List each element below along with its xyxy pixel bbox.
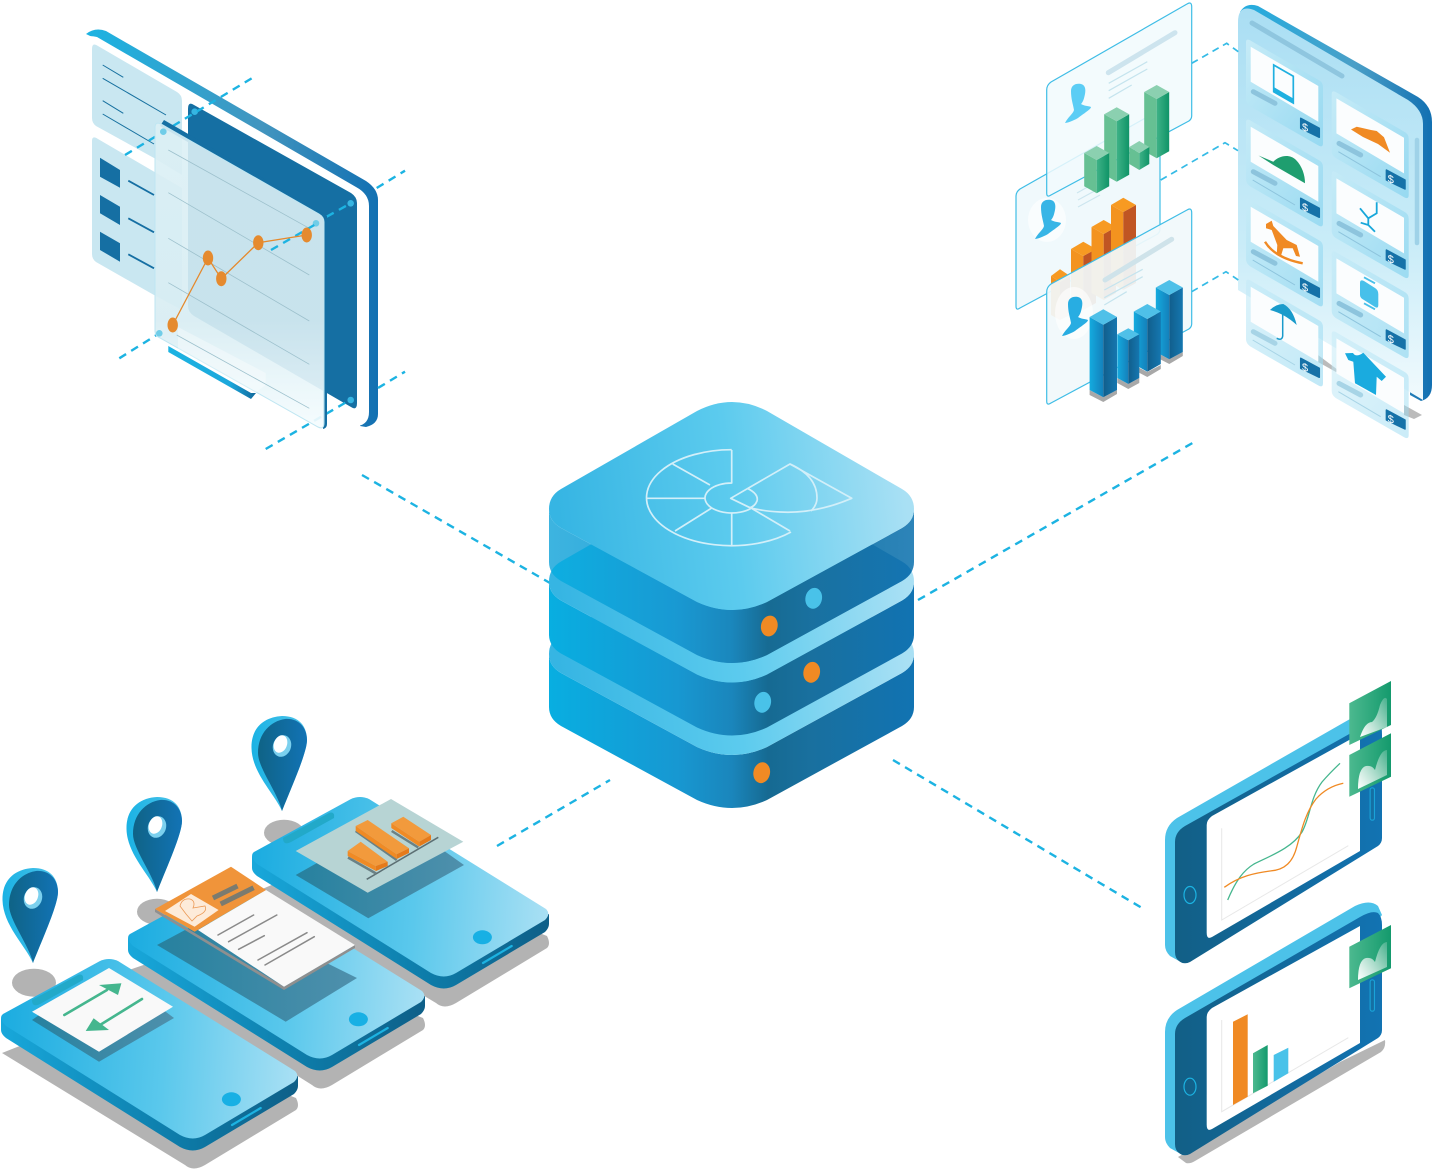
blue bars: [1090, 280, 1183, 402]
phone shadow: [1178, 1040, 1385, 1163]
product card row 1 right: $: [1388, 173, 1395, 187]
bar chart screen: [296, 799, 464, 918]
product card row 4 left: $: [1302, 361, 1309, 375]
glass chart sheet: [155, 120, 327, 429]
icon: tablet product: [1274, 65, 1293, 103]
product card row 1 left: [1246, 40, 1323, 146]
card: green chart: [1047, 3, 1192, 196]
icon: person: [1065, 84, 1091, 123]
list panel: [92, 45, 182, 175]
server layer 3: [549, 547, 914, 808]
stand base: [168, 346, 256, 399]
server layer 2: [549, 474, 914, 736]
green bars: [1084, 85, 1169, 193]
profile document: [155, 867, 357, 1022]
icon: pie chart logo: [647, 450, 852, 546]
icon: map pin 1: [2, 868, 58, 963]
panel: three location phones: [1, 716, 549, 1168]
phone 1: [1, 959, 298, 1168]
bar: blue: [1274, 1048, 1288, 1082]
transfer arrows screen: [32, 968, 174, 1062]
bar: orange: [1233, 1014, 1248, 1105]
tablet body: [1238, 8, 1423, 400]
dash across chart: [271, 224, 316, 250]
icon: orange hat: [1351, 127, 1390, 153]
tablet header bar: [1252, 23, 1342, 76]
table panel: [92, 137, 182, 310]
product card row 2 left: [1246, 120, 1323, 226]
pin shadows: [12, 820, 304, 997]
status lights: [751, 586, 824, 785]
panel: dashboard with layered line chart: [80, 30, 405, 449]
green thumbnail 2: [1349, 733, 1391, 797]
line chart: [168, 228, 312, 332]
server layer 1 body: [549, 510, 914, 663]
icon: rocking horse: [1265, 221, 1303, 263]
icon: person: [1062, 297, 1088, 336]
orange bars: [1051, 198, 1136, 320]
card: blue chart: [1047, 209, 1192, 404]
card: orange chart: [1016, 111, 1160, 309]
bar block 1: [348, 842, 388, 866]
icon: chair: [1360, 202, 1377, 232]
product card row 3 right: [1332, 251, 1409, 358]
table shadows: [1318, 355, 1422, 419]
phone with curve chart: [1165, 708, 1382, 963]
panel: e-commerce tablet with product cards: [1161, 5, 1432, 438]
bar block 3: [391, 817, 431, 842]
connector lines: [362, 441, 1196, 908]
panel: central database server stack: [549, 402, 914, 808]
product card row 4 left: [1246, 280, 1323, 386]
sheet markers: [156, 128, 319, 337]
phone 2: [128, 879, 425, 1088]
product card row 3 left: [1246, 200, 1323, 306]
product card row 4 right: $: [1388, 413, 1395, 427]
icon: t-shirt: [1345, 353, 1386, 395]
scroll bar: [1415, 140, 1419, 243]
icon: map pin 3: [251, 716, 307, 811]
tablet edge: [1240, 5, 1432, 401]
screen markers: [191, 108, 354, 403]
product card row 3 right: $: [1388, 333, 1395, 347]
product card row 4 right: [1332, 331, 1409, 438]
green thumbnail 3: [1349, 925, 1391, 988]
dashed projection lines: [119, 78, 405, 449]
bar block 2: [356, 820, 409, 854]
icon: green cap: [1258, 156, 1305, 183]
product card row 2 right: [1332, 171, 1409, 278]
dark back screen: [188, 104, 357, 408]
green thumbnail 1: [1349, 681, 1391, 745]
icon: umbrella: [1270, 304, 1297, 339]
product card row 2 left: $: [1302, 201, 1309, 215]
phone with bar chart: [1165, 902, 1382, 1155]
server top face: [549, 402, 914, 610]
connector dashes to tablet: [1161, 43, 1238, 292]
product card row 3 left: $: [1302, 281, 1309, 295]
product card row 1 right: [1332, 91, 1409, 198]
product card row 1 left: $: [1302, 121, 1309, 135]
icon: map pin 2: [126, 797, 182, 892]
icon: person: [1035, 200, 1061, 239]
bar: green: [1253, 1045, 1268, 1093]
product card row 2 right: $: [1388, 253, 1395, 267]
monitor frame: [80, 30, 378, 427]
panel: landscape phones with charts: [1165, 681, 1391, 1163]
panel: floating bar chart cards: [1016, 3, 1192, 404]
icon: watch: [1360, 277, 1378, 309]
phone 3: [252, 797, 549, 1006]
